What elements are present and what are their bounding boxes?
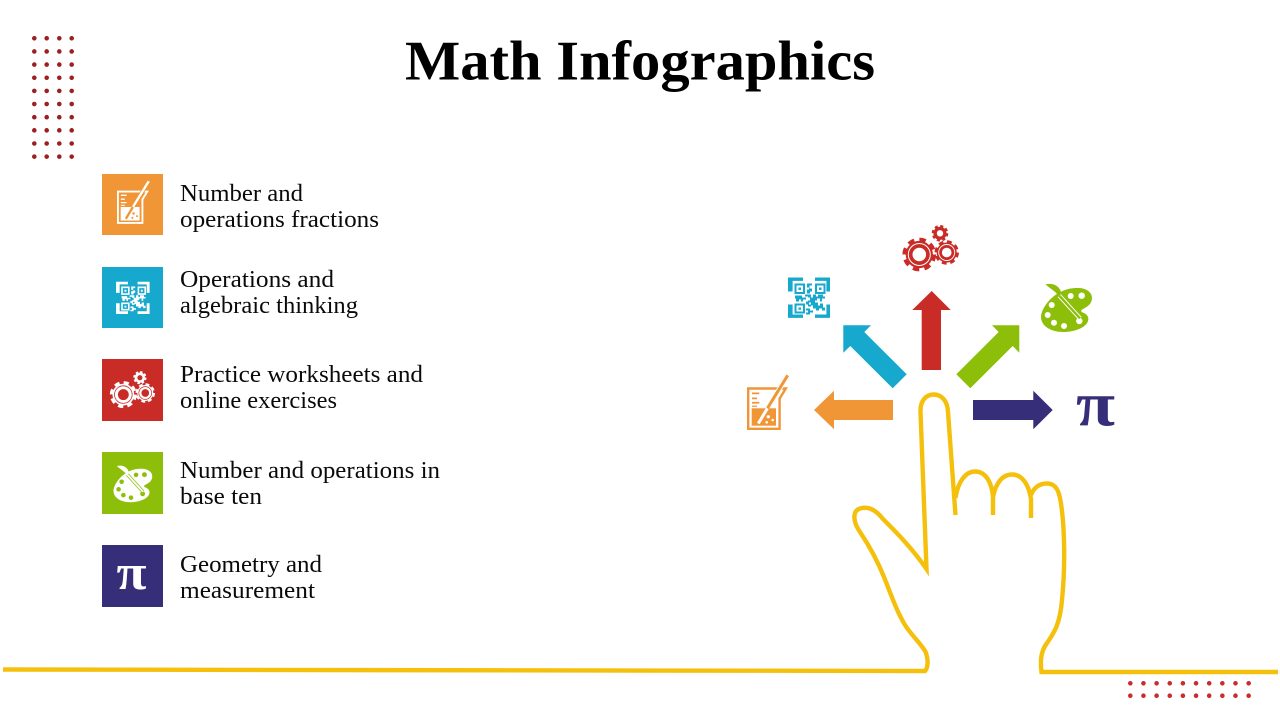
navy icon tile [102, 544, 163, 607]
label text: Number and operations in [180, 458, 440, 484]
list item: number and operations in base ten [102, 452, 440, 514]
orange icon tile [102, 174, 163, 235]
arrow: red up [912, 291, 951, 370]
label text: Practice worksheets and [180, 362, 423, 388]
label text: online exercises [180, 388, 337, 414]
list item: geometry and measurement [102, 544, 322, 607]
arrow: blue up-left [843, 325, 907, 388]
icon: gears [904, 226, 958, 269]
label text: Operations and [180, 267, 334, 293]
label text: operations fractions [180, 207, 379, 233]
list item: practice worksheets and online exercises [102, 359, 423, 421]
navy icon tile: π [116, 544, 146, 600]
decorative dot grid: bottom right [1130, 683, 1250, 696]
arrow: green up-right [956, 325, 1019, 388]
hand outline with ground line [3, 394, 1278, 672]
title: Math Infographics [405, 30, 875, 92]
icon: qr code [788, 278, 830, 318]
decorative dot grid: top left [34, 38, 72, 158]
icon: beaker [747, 375, 788, 430]
green icon tile [102, 452, 163, 514]
icon: pi: π [1076, 370, 1115, 440]
label text: measurement [180, 578, 315, 604]
blue icon tile [102, 267, 163, 328]
arrow: orange left [814, 391, 893, 429]
label text: algebraic thinking [180, 293, 358, 319]
label text: Geometry and [180, 552, 322, 578]
icon: palette [1041, 284, 1092, 332]
arrow: navy right [973, 391, 1053, 429]
list item: operations and algebraic thinking [102, 267, 358, 328]
label text: Number and [180, 181, 303, 207]
list item: number and operations fractions [102, 174, 379, 235]
red icon tile [102, 359, 163, 421]
label text: base ten [180, 484, 262, 510]
